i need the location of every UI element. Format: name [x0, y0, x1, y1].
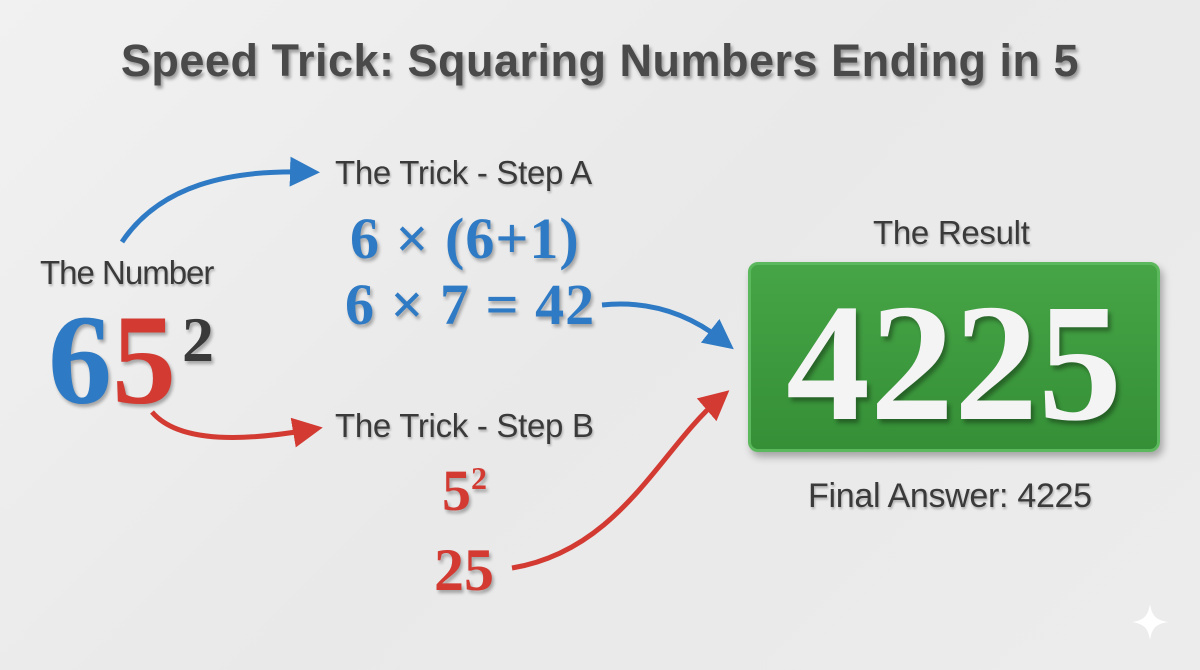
formula A1: 6 × (6+1) [350, 206, 580, 271]
label: the number: The Number [40, 254, 213, 291]
number 65 squared: 652 [48, 289, 214, 431]
arrow: number to step A [122, 172, 305, 242]
arrow: step B to result [512, 400, 718, 568]
final answer: Final Answer: 4225 [808, 477, 1092, 515]
label: result: The Result [873, 214, 1030, 251]
arrow: number to step B [152, 412, 308, 438]
result number: 4225 [786, 270, 1122, 456]
formula B1: 52 [442, 458, 487, 523]
arrow: step A to result [602, 304, 722, 340]
formula B2: 25 [434, 537, 494, 603]
label: step B: The Trick - Step B [335, 407, 594, 444]
title: Speed Trick: Squaring Numbers Ending in 5 [121, 35, 1079, 86]
label: step A: The Trick - Step A [335, 154, 592, 191]
result box [748, 262, 1160, 452]
formula A2: 6 × 7 = 42 [345, 272, 595, 337]
icon: sparkle [1133, 605, 1167, 639]
